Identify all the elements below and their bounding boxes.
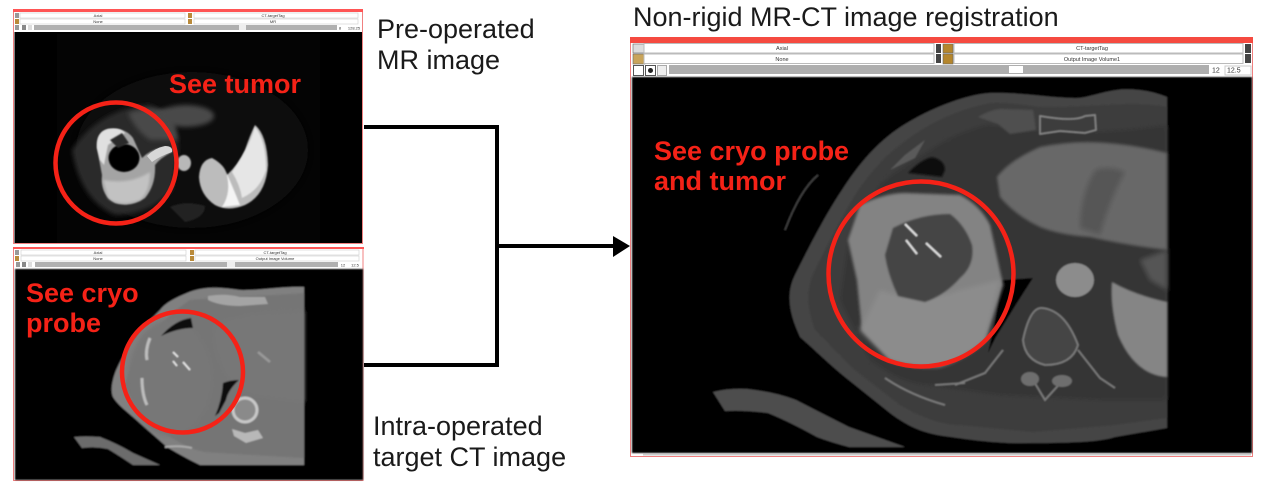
CT viewer toolbar: 12.5 bbox=[351, 262, 360, 268]
CT viewer toolbar: None bbox=[93, 256, 104, 261]
arrow to registration result bbox=[497, 236, 630, 257]
CT viewer toolbar: 12 bbox=[341, 262, 346, 268]
panel: non-rigid MR-CT registration result bbox=[630, 37, 1253, 456]
registration viewer toolbar: Axial bbox=[776, 46, 788, 52]
annotation: see cryo probe: See cryo bbox=[26, 278, 139, 308]
registration viewer toolbar: None bbox=[775, 57, 789, 63]
panel: pre-operated MR image bbox=[13, 9, 363, 244]
label: pre-operated MR image: MR image bbox=[377, 45, 500, 75]
label: intra-operated target CT image: target CT image bbox=[373, 442, 566, 472]
cryo probes bbox=[173, 352, 190, 370]
label: pre-operated MR image: Pre-operated bbox=[377, 14, 535, 44]
label: intra-operated target CT image: Intra-operated bbox=[373, 411, 543, 441]
registration viewer toolbar: Output Image Volume1 bbox=[1064, 57, 1120, 63]
sternum and chest wall bbox=[1040, 115, 1096, 134]
panel: intra-operated CT image bbox=[13, 247, 364, 480]
CT scan image bbox=[15, 269, 363, 480]
registration viewer toolbar: 12.5 bbox=[1227, 68, 1241, 74]
registration viewer toolbar: CT-targetTag bbox=[1076, 46, 1108, 52]
MR viewer toolbar: MR bbox=[270, 19, 276, 24]
MR viewer toolbar: 128.25 bbox=[348, 26, 361, 30]
bottom scrollbar bbox=[643, 454, 1251, 456]
registration viewer toolbar bbox=[633, 44, 1251, 76]
circle: cryo probe and tumor highlight bbox=[828, 182, 1014, 366]
MR viewer toolbar: None bbox=[93, 19, 104, 24]
upper abdominal organ bbox=[997, 142, 1167, 250]
connector bracket bbox=[364, 127, 497, 365]
annotation: see cryo probe and tumor: and tumor bbox=[654, 166, 786, 196]
MR viewer toolbar bbox=[15, 13, 361, 30]
CT viewer toolbar: Output Image Volume bbox=[256, 256, 295, 261]
lower right organ bbox=[1112, 282, 1167, 377]
registration viewer toolbar: 12 bbox=[1212, 68, 1220, 74]
air pockets bbox=[908, 157, 945, 177]
MR viewer toolbar: CT-targetTag bbox=[261, 13, 285, 18]
aorta bbox=[1056, 263, 1094, 297]
MR viewer toolbar: Axial bbox=[94, 13, 102, 18]
cryo probes bbox=[905, 224, 941, 257]
skin fragment bbox=[785, 175, 818, 230]
circle: tumor highlight on MR bbox=[56, 102, 176, 224]
MR viewer toolbar: 8 bbox=[339, 26, 342, 30]
annotation: see cryo probe and tumor: See cryo probe bbox=[654, 136, 849, 166]
liver with tumor bbox=[848, 193, 1003, 366]
heading: non-rigid registration: Non-rigid MR-CT image registration bbox=[633, 2, 1059, 32]
circle: cryo probe highlight on CT bbox=[122, 312, 243, 432]
CT viewer toolbar bbox=[15, 250, 360, 268]
CT viewer toolbar: CT-targetTag bbox=[263, 250, 287, 255]
annotation: see tumor: See tumor bbox=[169, 69, 302, 99]
spine bbox=[885, 308, 1115, 405]
registered CT-MR scan image bbox=[632, 77, 1252, 453]
annotation: see cryo probe: probe bbox=[26, 308, 101, 338]
CT viewer toolbar: Axial bbox=[94, 250, 102, 255]
MR scan image bbox=[14, 32, 362, 243]
